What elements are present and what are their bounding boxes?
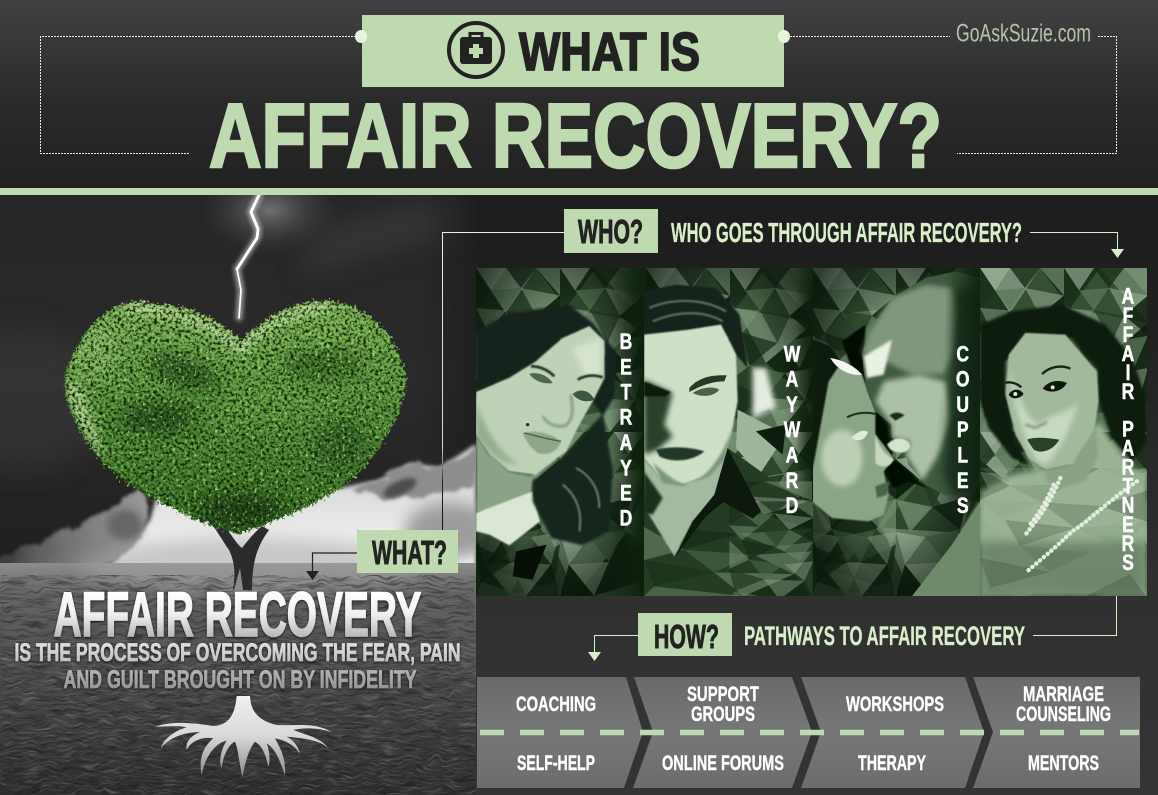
panel: pathways chevrons [477, 677, 1140, 788]
title plate: what is [362, 15, 784, 87]
panel: portraits [476, 268, 1148, 600]
portrait: couples [812, 268, 980, 596]
pathway labels: MARRIAGE [1023, 683, 1104, 706]
ground text: affair recovery definition: AND GUILT BROUGHT ON BY INFIDELITY [64, 666, 417, 694]
chevron band [477, 677, 1140, 788]
icon: lightning bolt [237, 195, 259, 318]
connector dots [355, 30, 790, 43]
pathway labels: MENTORS [1028, 752, 1099, 775]
field [0, 563, 476, 744]
label: wayward: WAYWARD [784, 342, 800, 519]
label: betrayed: BETRAYED [620, 330, 633, 531]
portrait: affair partners [980, 268, 1148, 599]
pathway labels: WORKSHOPS [846, 693, 944, 716]
ground text: affair recovery definition: IS THE PROCESS OF OVERCOMING THE FEAR, PAIN [14, 639, 460, 667]
who label: WHO? [578, 213, 643, 250]
ground text: affair recovery definition: AFFAIR RECOVERY [54, 580, 422, 650]
how label [638, 613, 732, 656]
label: couples: COUPLES [956, 342, 970, 519]
who label [564, 209, 658, 253]
arrow: who to portraits [1030, 232, 1124, 258]
how label: HOW? [654, 618, 719, 655]
header [40, 15, 1116, 187]
right section background [0, 195, 1158, 795]
dashed divider [480, 730, 1139, 735]
arrow: how to pathways [588, 636, 638, 661]
label: affair partners: AFFAIRPARTNERS [1122, 285, 1135, 576]
pathway labels: THERAPY [858, 752, 926, 775]
arrow: what to definition [306, 553, 357, 580]
pathway labels: SUPPORT [687, 683, 759, 706]
header background [0, 0, 1158, 188]
connector: portraits to how [1033, 596, 1116, 636]
heading: what is: WHAT IS [519, 22, 700, 82]
what label [357, 530, 458, 573]
portrait: betrayed [476, 268, 644, 596]
ground text: affair recovery definition [14, 590, 461, 691]
pathway labels: ONLINE FORUMS [662, 752, 784, 775]
sky [0, 197, 431, 556]
site name: GoAskSuzie.com [956, 20, 1091, 48]
pathway labels: GROUPS [691, 703, 755, 726]
icon: first aid kit [449, 23, 503, 77]
icon: roots [155, 696, 332, 777]
pathway labels: COACHING [516, 693, 596, 716]
heart-shaped tree crown [64, 301, 406, 534]
main title: AFFAIR RECOVERY? [209, 86, 942, 187]
pathway labels: SELF-HELP [517, 752, 595, 775]
tree trunk [212, 525, 269, 590]
dotted frame [40, 36, 1116, 154]
what label: WHAT? [372, 534, 447, 571]
panel: what – storm scene [0, 165, 495, 795]
portrait: wayward [644, 268, 814, 600]
pathway labels: COUNSELING [1016, 703, 1111, 726]
pathway separators [624, 677, 993, 788]
connector: what to who [442, 232, 564, 530]
pathway labels [516, 683, 1111, 775]
clouds and horizon glow [0, 444, 495, 568]
divider band [0, 188, 1158, 195]
portrait labels [620, 285, 1135, 576]
